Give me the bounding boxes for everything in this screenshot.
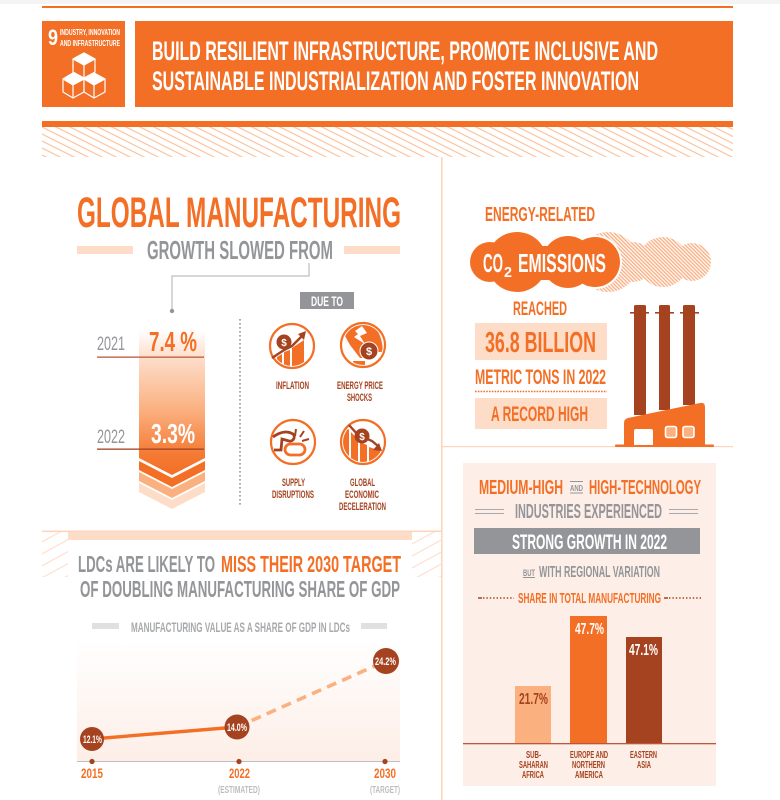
panel: ldcs manufacturing share	[42, 532, 441, 796]
arrow: growth slowdown	[139, 330, 205, 509]
point: 2030	[373, 648, 399, 674]
icon: inflation	[270, 324, 314, 370]
stat: 2021: 2021	[97, 334, 125, 355]
icon: inflation: $	[281, 338, 287, 349]
label: sub-saharan africa: SAHARAN	[519, 760, 548, 771]
label: global economic deceleration: DECELERATION	[339, 501, 386, 513]
icon: global economic deceleration: $	[359, 432, 365, 443]
text: energy-related: ENERGY-RELATED	[485, 204, 595, 226]
label: due to: DUE TO	[311, 293, 343, 309]
subheading: industries experienced	[475, 501, 698, 523]
axis label: 2030 target	[370, 765, 400, 796]
label: europe and northern america	[570, 750, 608, 781]
stat: 36.8 billion: 36.8 BILLION	[485, 327, 596, 359]
series: actual line	[92, 727, 237, 739]
point: 2015	[80, 727, 104, 751]
label: energy price shocks: ENERGY PRICE	[337, 380, 383, 392]
callout: a record high: A RECORD HIGH	[491, 403, 588, 426]
label: eastern asia: ASIA	[637, 760, 651, 771]
label: eastern asia	[630, 750, 657, 771]
label: due to	[300, 292, 354, 309]
label: europe and northern america: NORTHERN	[572, 760, 605, 771]
label: inflation: INFLATION	[276, 380, 309, 392]
point: 2022	[224, 714, 250, 740]
SDG 9 tile: 9	[48, 25, 58, 50]
panel: high technology industries	[463, 463, 716, 786]
chart title: manufacturing value share	[92, 619, 387, 635]
icon: energy price shocks	[341, 323, 385, 367]
label: sub-saharan africa	[519, 750, 548, 781]
panel: global manufacturing	[77, 189, 401, 513]
label: global economic deceleration: ECONOMIC	[345, 489, 379, 501]
label: energy price shocks	[337, 380, 383, 404]
callout: strong growth in 2022: STRONG GROWTH IN 2022	[512, 531, 667, 554]
text: metric tons in 2022: METRIC TONS IN 2022	[475, 366, 606, 389]
subheading: growth slowed from	[77, 235, 400, 265]
bar: europe and northern america: 47.7%	[575, 621, 604, 638]
label: sub-saharan africa: SUB-	[526, 750, 541, 761]
label: europe and northern america: AMERICA	[575, 770, 603, 781]
series: target dashed line	[237, 661, 386, 727]
stat: 2022: 3.3%	[151, 418, 195, 449]
stat: 36.8 billion	[475, 323, 607, 360]
text: but with regional variation: BUT	[523, 568, 535, 578]
label: eastern asia: EASTERN	[630, 750, 657, 761]
chart title: share in total manufacturing: SHARE IN TOTAL MANUFACTURING	[518, 590, 661, 607]
axis label: 2022 estimated: 2022	[229, 765, 250, 781]
heading: ldcs miss 2030 target: MISS THEIR 2030 TARGET	[221, 551, 401, 577]
label: global economic deceleration	[339, 477, 386, 513]
icon: co2 cloud with label: CO	[483, 248, 503, 278]
heading: ldcs miss 2030 target	[78, 551, 401, 602]
bar: eastern asia	[626, 637, 662, 743]
stat: 2021: 7.4 %	[149, 326, 197, 357]
axis label: 2030 target: (TARGET)	[370, 785, 400, 796]
SDG 9 tile: INDUSTRY, INNOVATION	[60, 28, 120, 37]
bar: europe and northern america	[570, 616, 607, 743]
bar: eastern asia: 47.1%	[629, 642, 658, 659]
panel: co2 emissions	[470, 204, 714, 447]
connector line	[170, 263, 309, 313]
heading: medium-high and high-technology	[479, 477, 701, 499]
bar chart	[463, 616, 716, 781]
heading: medium-high and high-technology: AND	[570, 484, 583, 493]
callout: strong growth in 2022	[474, 528, 700, 554]
SDG 9 tile	[42, 21, 125, 107]
label: europe and northern america: EUROPE AND	[570, 750, 608, 761]
icon: global economic deceleration	[341, 420, 385, 465]
label: energy price shocks: SHOCKS	[347, 392, 372, 404]
icon: energy price shocks: $	[366, 346, 372, 358]
heading: medium-high and high-technology: MEDIUM-HIGH	[479, 477, 563, 499]
subheading: industries experienced: INDUSTRIES EXPERIENCED	[515, 501, 662, 523]
chart title: manufacturing value share: MANUFACTURING VALUE AS A SHARE OF GDP IN LDCs	[131, 619, 350, 635]
icon: factory	[615, 305, 714, 447]
axis label: 2015: 2015	[81, 765, 103, 781]
stat: 2022	[97, 418, 204, 450]
text: reached: REACHED	[513, 299, 567, 320]
heading: global manufacturing: GLOBAL MANUFACTURING	[77, 189, 401, 237]
label: sub-saharan africa: AFRICA	[522, 770, 544, 781]
heading: ldcs miss 2030 target: OF DOUBLING MANUFACTURING SHARE OF GDP	[80, 576, 400, 602]
top page shadow	[0, 0, 780, 4]
bar: sub-saharan africa	[515, 686, 551, 743]
hatched divider	[42, 121, 733, 157]
line chart	[77, 640, 400, 796]
point: 2030: 24.2%	[375, 656, 396, 668]
label: supply disruptions: DISRUPTIONS	[272, 489, 314, 501]
SDG 9 tile: AND INFRASTRUCTURE	[60, 39, 120, 48]
stat: 2022: 2022	[97, 427, 125, 448]
axis label: 2030 target: 2030	[374, 765, 396, 781]
icon: co2 cloud with label	[470, 232, 622, 292]
point: 2022: 14.0%	[227, 722, 247, 734]
label: global economic deceleration: GLOBAL	[350, 477, 375, 489]
top rule	[42, 6, 733, 8]
callout: a record high	[475, 398, 607, 429]
icon: co2 cloud with label: EMISSIONS	[518, 248, 606, 278]
icon: hatched smoke cloud	[578, 232, 711, 292]
icon: co2 cloud with label: 2	[504, 264, 512, 281]
title banner	[135, 21, 733, 107]
axis label: 2022 estimated: (ESTIMATED)	[218, 785, 260, 796]
axis label: 2022 estimated	[218, 765, 260, 796]
label: supply disruptions	[272, 477, 314, 501]
point: 2015: 12.1%	[83, 734, 102, 746]
icon: cubes	[63, 53, 105, 98]
icon: supply disruptions	[271, 420, 315, 464]
stat: 2021	[97, 326, 204, 358]
heading: ldcs miss 2030 target: LDCs ARE LIKELY TO	[78, 551, 215, 577]
label: supply disruptions: SUPPLY	[282, 477, 305, 489]
text: but with regional variation: WITH REGIONAL VARIATION	[539, 564, 660, 581]
subheading: growth slowed from: GROWTH SLOWED FROM	[147, 235, 333, 265]
bar: sub-saharan africa: 21.7%	[519, 691, 548, 708]
text: but with regional variation	[523, 564, 660, 581]
